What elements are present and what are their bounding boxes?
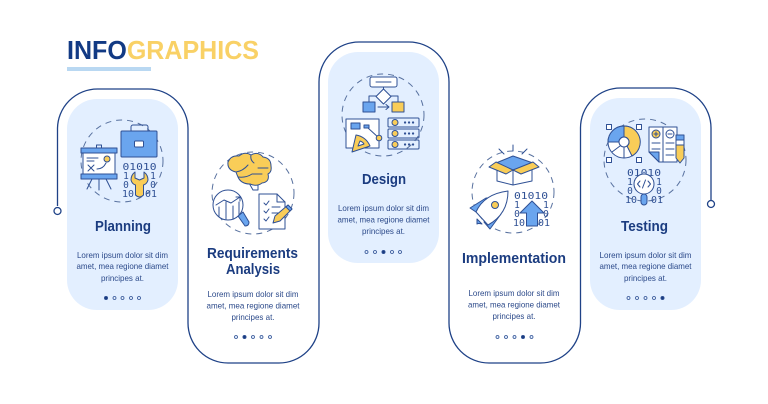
text block: planning: amet, mea regione diamet	[76, 261, 169, 271]
icon: open box, rocket and arrow: 01	[538, 218, 550, 229]
icon: planning board, briefcase and wrench: 1	[123, 171, 129, 182]
text block: requirements analysis: amet, mea regione diamet	[206, 300, 300, 310]
pagination dots: requirements analysis	[234, 335, 272, 339]
heading: implementation: Implementation	[462, 251, 566, 267]
icon: open box, rocket and arrow: 01010	[514, 191, 548, 202]
icon: open box, rocket and arrow	[470, 145, 554, 233]
text block: testing: amet, mea regione diamet	[600, 261, 692, 271]
heading: design: Design	[362, 172, 406, 188]
icon: pie chart, checklist and code magnifier: 0	[627, 186, 633, 197]
connector outline	[54, 42, 714, 363]
heading: requirements analysis	[207, 246, 298, 278]
panel: implementation	[462, 145, 566, 339]
icon: open box, rocket and arrow: 0	[514, 209, 520, 220]
heading: requirements analysis: Analysis	[226, 262, 280, 278]
title: INFOGRAPHICS	[67, 35, 259, 65]
icon: pie chart, checklist and code magnifier: 01	[651, 195, 663, 206]
icon: planning board, briefcase and wrench	[81, 120, 163, 202]
text block: testing: Lorem ipsum dolor sit dim	[600, 250, 692, 260]
panel: requirements analysis	[206, 152, 300, 339]
icon: pie chart, checklist and code magnifier: 1	[627, 177, 633, 188]
icon: open box, rocket and arrow: 1	[543, 200, 549, 211]
text block: design: Lorem ipsum dolor sit dim	[338, 203, 429, 213]
heading: testing: Testing	[621, 219, 668, 235]
icon: pie chart, checklist and code magnifier: 10	[625, 195, 637, 206]
icon: pie chart, checklist and code magnifier: 0	[656, 186, 662, 197]
icon: brain, magnifier and document	[212, 152, 294, 234]
icon: planning board, briefcase and wrench: 0	[150, 180, 156, 191]
icon: open box, rocket and arrow: 0	[543, 209, 549, 220]
heading: planning: Planning	[95, 219, 151, 235]
icon: pie chart, checklist and code magnifier: 1	[656, 177, 662, 188]
panel: planning	[76, 120, 169, 300]
pagination dots: planning	[104, 296, 140, 300]
heading: requirements analysis: Requirements	[207, 246, 298, 262]
icon: planning board, briefcase and wrench: 0	[123, 180, 129, 191]
icon: planning board, briefcase and wrench: 01010	[122, 162, 157, 173]
icon: pie chart, checklist and code magnifier	[604, 119, 686, 206]
text block: planning: Lorem ipsum dolor sit dim	[77, 250, 168, 260]
text block: planning: principes at.	[101, 273, 144, 283]
panel: testing	[600, 119, 692, 300]
text block: testing: principes at.	[624, 273, 667, 283]
text block: requirements analysis: Lorem ipsum dolor sit dim	[208, 289, 299, 299]
panel backgrounds: steps 1, 3, 5	[67, 52, 701, 310]
text block: implementation: principes at.	[492, 311, 536, 321]
pagination dots: design	[365, 250, 402, 254]
text block: implementation: Lorem ipsum dolor sit dim	[468, 288, 560, 298]
pagination dots: implementation	[496, 335, 533, 339]
icon: open box, rocket and arrow: 1	[514, 200, 520, 211]
icon: pie chart, checklist and code magnifier: 01010	[627, 168, 661, 179]
text block: design: amet, mea regione diamet	[338, 214, 430, 224]
text block: requirements analysis: principes at.	[232, 312, 274, 322]
icon: planning board, briefcase and wrench: 1	[150, 171, 156, 182]
pagination dots: testing	[627, 296, 664, 300]
icon: planning board, briefcase and wrench: 01	[145, 189, 157, 200]
panel: design	[338, 74, 430, 254]
icon: planning board, briefcase and wrench: 10	[122, 189, 134, 200]
icon: flowchart, drawing board and servers	[342, 74, 424, 156]
text block: design: principes at.	[362, 226, 405, 236]
icon: open box, rocket and arrow: 10	[513, 218, 525, 229]
text block: implementation: amet, mea regione diamet	[468, 300, 561, 310]
